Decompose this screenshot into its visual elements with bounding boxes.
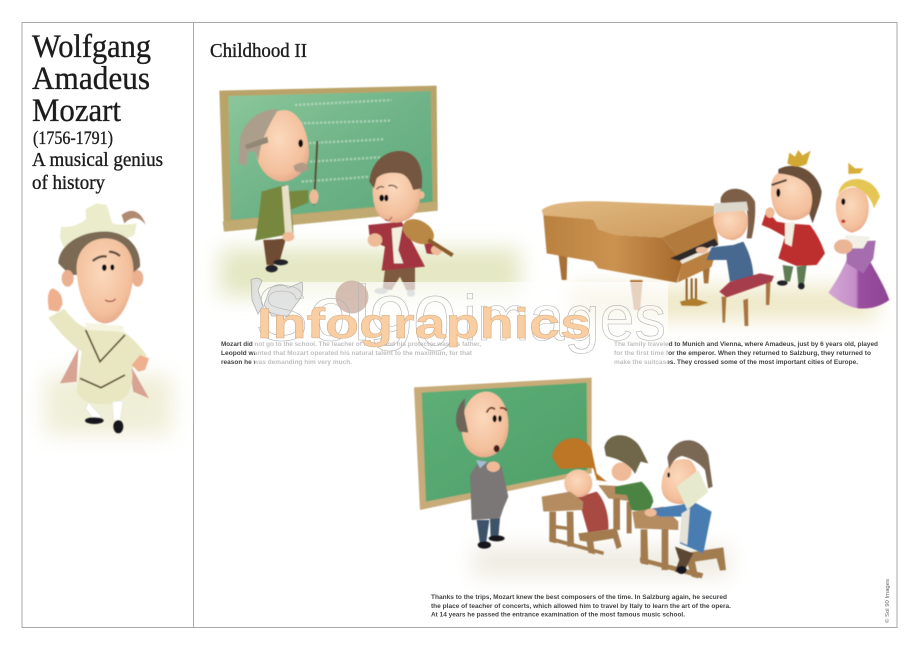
title block: A musical genius	[32, 150, 163, 171]
scene 1: father teaching Mozart at the blackboard	[219, 86, 520, 297]
watermark: Sol 90 images outline: Sol	[255, 269, 371, 357]
student in red	[552, 438, 608, 533]
text: thanks to the trips: At 14 years he passed the entrance examination of the most famous music school.	[431, 612, 685, 618]
watermark: Sol 90 images outline: 90	[369, 279, 457, 367]
bald teacher	[456, 392, 509, 549]
green blackboard	[414, 378, 592, 510]
ground shadow	[220, 248, 520, 297]
watermark logo: knight and ball	[251, 278, 368, 316]
red stool	[719, 273, 774, 326]
text: Mozart did not go to school: Mozart did not go to the school. The teacher of music and his protector was his father,	[221, 341, 481, 348]
column divider	[192, 22, 194, 628]
text: family travelled to Munich and Vienna: The family traveled to Munich and Vienna, where Amadeus, just by 6 years old, played	[614, 341, 878, 348]
teacher Leopold	[238, 109, 319, 272]
emperor with crown	[762, 150, 825, 289]
ground shadow	[570, 287, 877, 320]
illustration: Mozart in plumed hat	[45, 203, 172, 435]
watermark: Sol 90 images outline	[255, 269, 666, 367]
credit line: © Sol 90 Images	[884, 579, 891, 623]
desk for student in red	[542, 492, 622, 555]
ground shadow	[473, 547, 730, 577]
text: Mozart did not go to school: reason he was demanding him very much.	[221, 359, 352, 366]
text: thanks to the trips	[431, 594, 731, 618]
desk and Mozart in blue coat	[632, 440, 726, 578]
watermark band	[255, 282, 668, 372]
watermark: Infographics: Infographics	[257, 300, 591, 348]
title block	[32, 29, 163, 194]
watermark: Sol 90 images outline: images	[463, 282, 666, 354]
text: thanks to the trips: the place of teacher of concerts, which allowed him to travel by Italy to learn the art of the opera.	[431, 603, 731, 610]
young Mozart with violin	[368, 151, 453, 297]
blindfolded Mozart	[696, 189, 755, 282]
rear desk and student in green	[598, 435, 653, 533]
title block: Mozart	[32, 93, 121, 129]
text: family travelled to Munich and Vienna	[614, 341, 878, 366]
title block: (1756-1791)	[33, 128, 113, 149]
grand piano	[542, 201, 718, 310]
title block: Amadeus	[32, 61, 150, 97]
heading: Childhood II: Childhood II	[210, 41, 307, 62]
text: Mozart did not go to school	[221, 341, 481, 366]
blackboard with music notation	[219, 86, 438, 232]
text: family travelled to Munich and Vienna: for the first time for the emperor. When they returned to Salzburg, they returned to	[614, 350, 871, 357]
title block: of history	[32, 173, 105, 194]
title block: Wolfgang	[32, 29, 151, 65]
text: family travelled to Munich and Vienna: make the suitcases. They crossed some of the most important cities of Europe.	[614, 359, 858, 366]
empress with crown	[828, 163, 889, 309]
scene 3: Mozart taking the music school examination	[414, 378, 730, 578]
scene 2: blindfolded Mozart playing piano for the emperor	[542, 150, 889, 326]
text: Mozart did not go to school: Leopold wanted that Mozart operated his natural talent to the maximum, for that	[221, 350, 473, 357]
text: thanks to the trips: Thanks to the trips, Mozart knew the best composers of the time. In Salzburg again, he secured	[431, 594, 727, 601]
